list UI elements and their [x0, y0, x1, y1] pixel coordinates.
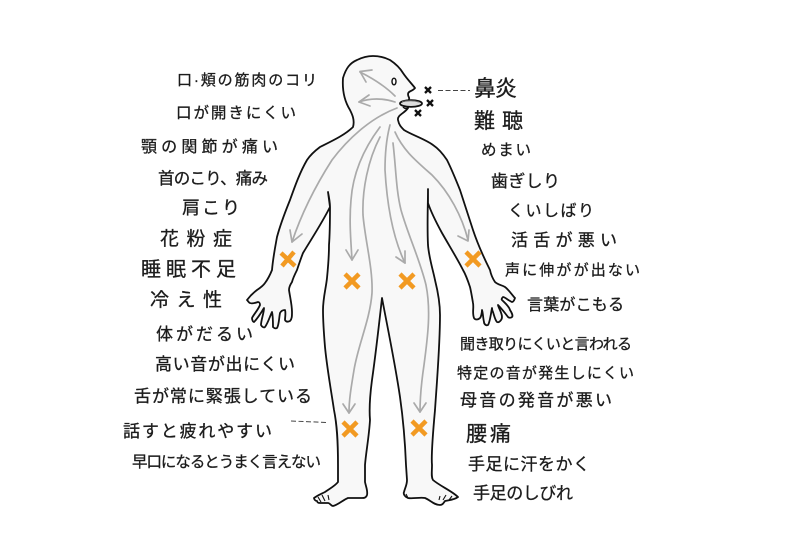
dashed leader: nose	[438, 90, 470, 92]
black x marks near jaw	[415, 87, 433, 116]
left symptom list: 顎の関節が痛い	[141, 138, 278, 156]
right symptom list: 手足のしびれ	[473, 484, 573, 503]
left symptom list: 高い音が出にくい	[155, 355, 295, 374]
right symptom list: 歯ぎしり	[491, 172, 560, 191]
left symptom list: 話すと疲れやすい	[123, 422, 272, 441]
arrow to right hip	[385, 125, 405, 263]
x: right forearm	[466, 252, 480, 266]
left symptom list: 冷え性	[150, 289, 222, 311]
orange x marks	[281, 252, 480, 436]
body figure	[247, 56, 515, 506]
left symptom list	[123, 72, 321, 471]
arrow to left hip	[346, 127, 380, 260]
x: left forearm	[281, 252, 295, 266]
right symptom list: 手足に汗をかく	[468, 455, 590, 474]
right symptom list: くいしばり	[508, 202, 594, 220]
right symptom list: めまい	[481, 142, 531, 159]
right symptom list: 母音の発音が悪い	[460, 391, 612, 410]
right symptom list	[457, 76, 640, 503]
right symptom list: 活舌が悪い	[511, 231, 617, 250]
arrow to left knee	[343, 137, 380, 413]
x: right hip	[400, 274, 414, 288]
right symptom list: 聞き取りにくいと言われる	[460, 336, 632, 353]
mouth	[400, 100, 422, 108]
right symptom list: 言葉がこもる	[527, 296, 624, 314]
left symptom list: 睡眠不足	[141, 258, 236, 281]
left symptom list: 花粉症	[160, 228, 232, 250]
arrow to right arm of figure	[290, 108, 397, 242]
right symptom list: 鼻炎	[474, 76, 517, 101]
arrow to back of head	[359, 95, 395, 106]
x: left hip	[345, 274, 359, 288]
arrow to head top	[360, 70, 395, 96]
left symptom list: 体がだるい	[156, 325, 253, 344]
right symptom list: 難聴	[474, 110, 523, 133]
arrow to right knee	[393, 143, 429, 412]
dashed leader: knee	[291, 421, 327, 422]
eye	[392, 78, 396, 85]
x: left knee	[343, 422, 357, 436]
x: right knee	[412, 421, 426, 435]
arrow to left arm of figure	[395, 132, 469, 241]
tension arrows	[290, 70, 469, 413]
right symptom list: 声に伸がが出ない	[505, 261, 640, 279]
left symptom list: 肩こり	[182, 198, 240, 218]
right symptom list: 特定の音が発生しにくい	[457, 365, 634, 382]
left symptom list: 首のこり、痛み	[158, 169, 268, 188]
left symptom list: 早口になるとうまく言えない	[132, 453, 321, 471]
left symptom list: 口が開きにくい	[176, 104, 296, 122]
left symptom list: 口·頬の筋肉のコリ	[177, 72, 317, 89]
body outline	[247, 56, 515, 506]
toes	[318, 494, 452, 502]
left symptom list: 舌が常に緊張している	[134, 387, 312, 406]
right symptom list: 腰痛	[466, 423, 511, 446]
